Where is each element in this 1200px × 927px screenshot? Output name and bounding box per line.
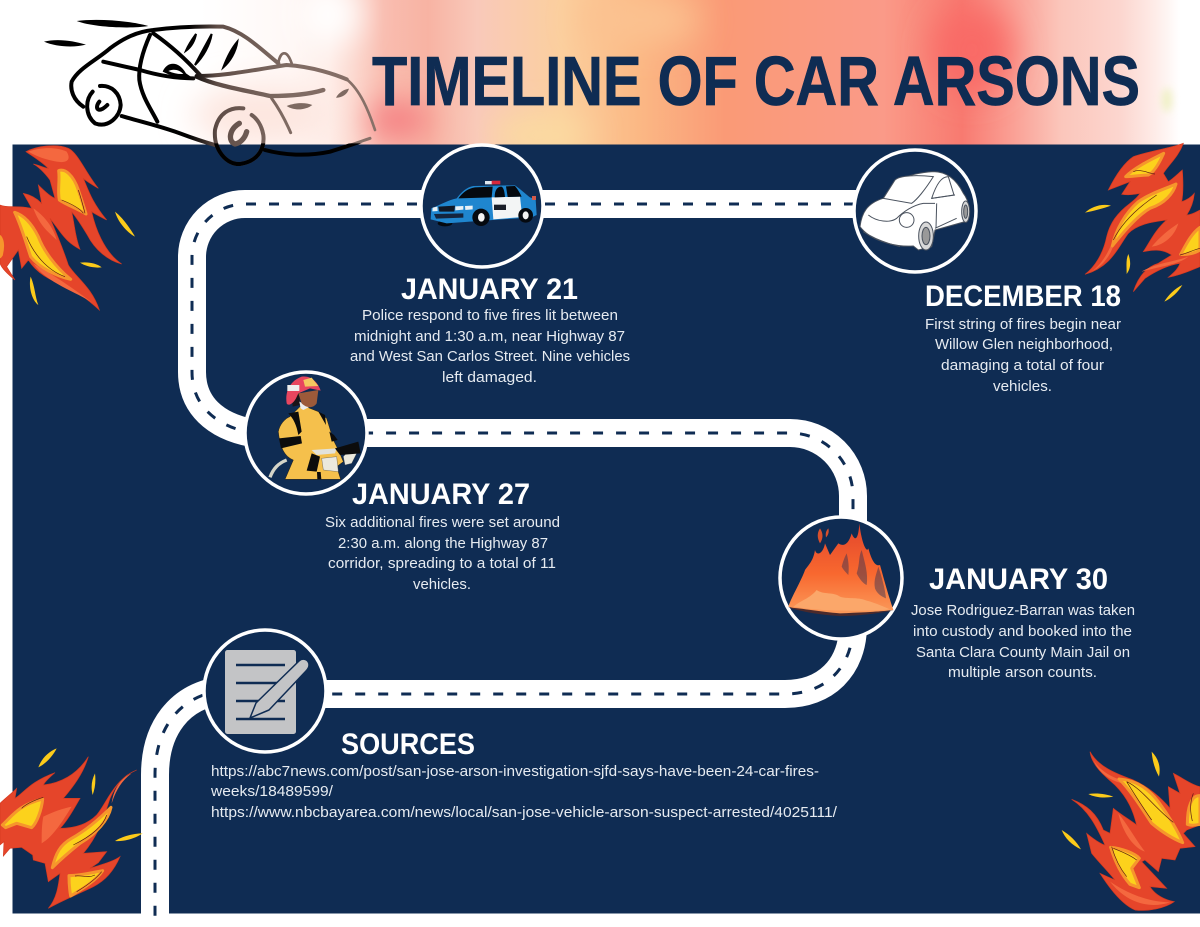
event: December 18: damaging a total of four xyxy=(941,358,1104,374)
icon: firefighter xyxy=(245,372,367,494)
flames: bottom left xyxy=(0,748,143,908)
event: January 30: Jose Rodriguez-Barran was taken xyxy=(911,603,1135,619)
event: January 30: into custody and booked into the xyxy=(913,624,1132,640)
icon: notepad and pen xyxy=(204,630,326,752)
flame xyxy=(788,523,894,616)
road: winding path xyxy=(155,204,900,926)
sources: https://abc7news.com/post/san-jose-arson-investigation-sjfd-says-have-been-24-car-fires- xyxy=(211,764,819,780)
watercolor header background xyxy=(188,0,1176,144)
event: January 27: vehicles. xyxy=(413,577,471,593)
event: January 30: multiple arson counts. xyxy=(948,665,1097,681)
illustration: sketched car xyxy=(44,20,375,164)
event: January 21: midnight and 1:30 a.m, near Highway 87 xyxy=(354,329,625,345)
event: January 27: 2:30 a.m. along the Highway 87 xyxy=(338,536,548,552)
event: January 27: JANUARY 27 xyxy=(352,478,530,511)
event: December 18: vehicles. xyxy=(993,379,1052,395)
flames: top left xyxy=(0,146,135,310)
event: December 18: DECEMBER 18 xyxy=(925,280,1121,313)
icon: beetle car xyxy=(854,150,976,272)
event: January 21: left damaged. xyxy=(442,370,537,386)
event: January 30: JANUARY 30 xyxy=(929,563,1108,596)
event: January 21: Police respond to five fires lit between xyxy=(362,308,618,324)
event: January 21 xyxy=(350,273,630,386)
sources: https://www.nbcbayarea.com/news/local/san-jose-vehicle-arson-suspect-arrested/4025111/ xyxy=(211,805,838,821)
event: January 30 xyxy=(911,563,1135,681)
event: January 27 xyxy=(325,478,560,593)
event: January 21: JANUARY 21 xyxy=(401,273,578,306)
event: December 18 xyxy=(925,280,1121,395)
notepad xyxy=(225,650,296,734)
sources: weeks/18489599/ xyxy=(210,784,334,800)
sources: SOURCES xyxy=(341,728,475,761)
event: January 27: corridor, spreading to a total of 11 xyxy=(328,556,556,572)
car outline xyxy=(860,172,970,250)
flames: bottom right xyxy=(1062,752,1200,910)
icon: police car xyxy=(421,145,543,267)
event: January 21: and West San Carlos Street. Nine vehicles xyxy=(350,349,630,365)
event: January 27: Six additional fires were set around xyxy=(325,515,560,531)
car body xyxy=(431,181,537,226)
event: December 18: Willow Glen neighborhood, xyxy=(935,337,1113,353)
figure xyxy=(270,376,361,479)
flames: top right xyxy=(1085,143,1200,302)
event: December 18: First string of fires begin near xyxy=(925,317,1121,333)
sources xyxy=(210,728,838,821)
event: January 30: Santa Clara County Main Jail on xyxy=(916,645,1130,661)
icon: fire xyxy=(780,517,902,639)
pen xyxy=(250,659,309,718)
